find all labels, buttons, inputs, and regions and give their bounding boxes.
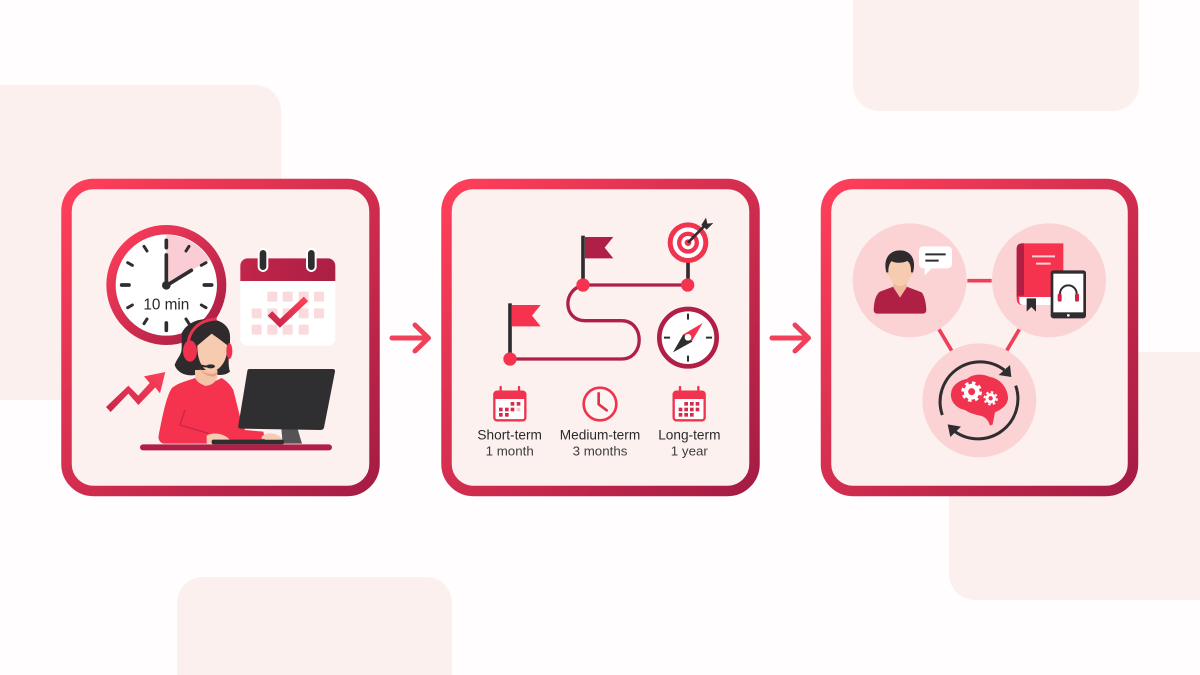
icon: target with dart (668, 218, 713, 292)
icon: clock showing 10 minutes (111, 230, 222, 340)
flag: second milestone (576, 236, 613, 292)
panel: time and routine (66, 184, 374, 491)
node: mentor conversation (853, 223, 967, 337)
node: book and audio tablet (992, 223, 1106, 337)
column: short-term: 1 month (486, 444, 534, 459)
column: long-term: 1 year (671, 444, 708, 459)
illustration: woman with headset at computer (140, 319, 335, 450)
column: short-term (477, 387, 542, 459)
column: long-term: Long-term (658, 428, 720, 443)
arrow: step 1 to step 2 (392, 325, 428, 351)
node: brain with gears and cycle arrows (922, 343, 1036, 457)
icon: calendar with check mark (240, 249, 335, 346)
connector lines (939, 281, 1019, 351)
panel: goal roadmap (446, 184, 754, 491)
column: medium-term: 3 months (573, 444, 628, 459)
clock label: 10 min (143, 296, 189, 313)
icon: rising arrow (106, 372, 165, 412)
arrow: step 2 to step 3 (772, 325, 808, 351)
column: long-term (658, 387, 720, 459)
column: medium-term (560, 388, 640, 459)
flag: first milestone (503, 303, 541, 366)
roadmap path (510, 285, 688, 359)
panel: learning network (826, 184, 1133, 491)
column: short-term: Short-term (477, 428, 542, 443)
icon: compass (659, 309, 717, 366)
column: medium-term: Medium-term (560, 428, 640, 443)
